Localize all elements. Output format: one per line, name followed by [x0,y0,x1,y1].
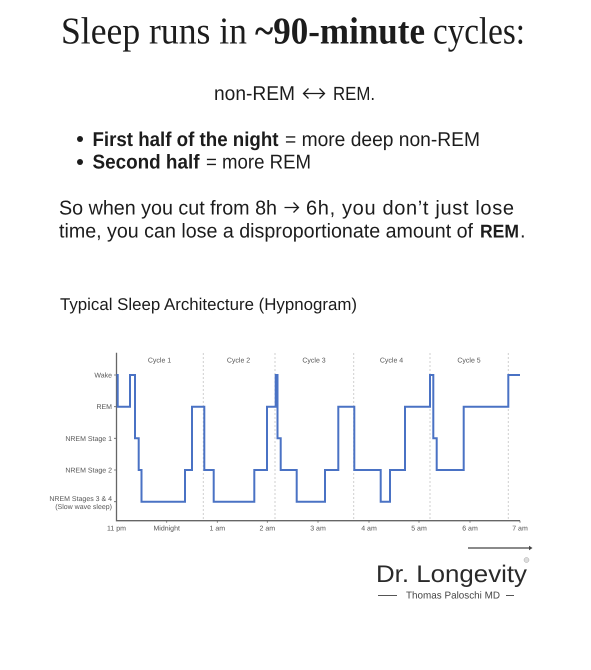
title [61,10,525,52]
bullet list: Second half [92,152,200,174]
logo: Dr. Longevity: Thomas Paloschi MD [406,590,500,602]
x axis labels: 4 am [361,526,377,532]
bullet list: = more deep non-REM [285,129,480,151]
subtitle: non-REM to REM [214,83,375,105]
y axis labels: (Slow wave sleep) [55,503,112,511]
logo: Dr. Longevity [376,558,529,602]
x axis labels: 3 am [310,526,326,532]
cycle labels [148,356,481,364]
x axis labels: 11 pm [107,526,126,532]
axes [114,353,520,523]
y axis labels: NREM Stage 2 [65,468,112,474]
cycle labels: Cycle 4 [380,356,403,364]
y axis labels: Wake [94,372,112,380]
y axis labels: NREM Stages 3 & 4 [49,496,112,503]
explanation paragraph: So when you cut from 8h [59,198,277,220]
cycle labels: Cycle 5 [457,356,481,364]
title: ~90-minute [255,10,425,52]
explanation paragraph: REM [480,220,519,242]
x axis labels: Midnight [153,524,180,532]
y axis labels: NREM Stage 1 [65,436,112,443]
title: cycles: [433,10,525,52]
cycle labels: Cycle 1 [148,356,171,364]
x axis labels: 5 am [411,526,427,532]
y axis labels: REM [96,404,112,411]
explanation paragraph: 6h, you don’t just lose [306,198,514,220]
x axis labels: 6 am [462,526,478,532]
cycle dividers [203,353,508,520]
x axis labels: 7 am [512,526,528,532]
x axis labels: 2 am [260,526,275,532]
explanation paragraph: . [520,220,526,242]
explanation paragraph: time, you can lose a disproportionate amount of [59,220,473,242]
bullet list: First half of the night [92,129,279,151]
sleep stage line [116,375,520,502]
cycle labels: Cycle 3 [302,356,326,364]
title: Sleep runs in [61,10,247,52]
chart heading: Typical Sleep Architecture (Hypnogram) [60,295,357,314]
logo: Dr. Longevity: Dr. Longevity [376,561,527,588]
y axis labels [49,372,112,511]
subtitle: non-REM to REM: non-REM [214,83,295,105]
explanation paragraph [59,198,526,242]
bullet list: = more REM [206,152,311,174]
x axis labels [107,524,528,532]
hypnogram chart [49,353,528,532]
cycle labels: Cycle 2 [227,356,250,364]
x axis labels: 1 am [210,526,225,532]
subtitle: non-REM to REM: REM. [333,84,375,105]
bullet list [77,129,480,174]
arrow [468,546,532,550]
